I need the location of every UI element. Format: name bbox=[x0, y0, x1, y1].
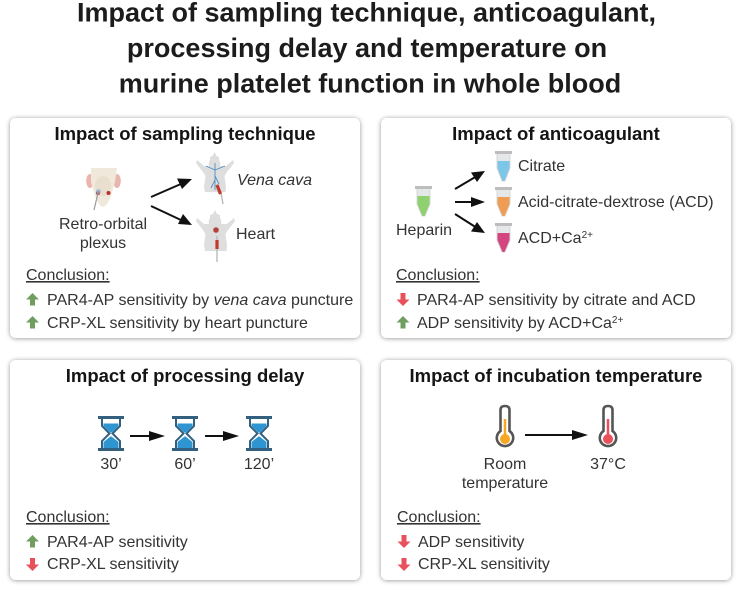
conclusion: processing delay bbox=[26, 509, 188, 573]
icon: green up arrow bbox=[26, 316, 39, 328]
icon: heparin tube bbox=[415, 186, 432, 216]
conclusion: incubation temperature bbox=[397, 509, 550, 573]
arrow: to ACD bbox=[455, 197, 485, 207]
conclusion: incubation temperature: ADP sensitivity bbox=[418, 534, 524, 551]
conclusion: processing delay: CRP-XL sensitivity bbox=[47, 556, 179, 573]
icon: mouse with vena cava puncture bbox=[196, 152, 234, 204]
icon: green up arrow bbox=[26, 535, 39, 548]
arrow: room temperature to 37 bbox=[525, 430, 588, 440]
label: 120 minutes: 120’ bbox=[244, 456, 274, 473]
panel: incubation temperature bbox=[381, 360, 731, 580]
label: 30 minutes: 30’ bbox=[100, 456, 122, 473]
conclusion: incubation temperature: CRP-XL sensitivity bbox=[418, 556, 550, 573]
label: ACD+Ca2+: ACD+Ca bbox=[518, 230, 582, 247]
icon: hourglass 30 bbox=[98, 416, 124, 451]
panel: processing delay bbox=[10, 360, 360, 580]
icon: mouse head with retro-orbital needle bbox=[86, 168, 121, 210]
title bbox=[77, 0, 656, 98]
heading: processing delay: Impact of processing delay bbox=[66, 365, 305, 386]
icon: red down arrow bbox=[26, 558, 39, 571]
arrow: to vena cava bbox=[151, 178, 192, 197]
icon: green up arrow bbox=[26, 293, 39, 306]
label: retro-orbital plexus: Retro-orbital bbox=[59, 216, 147, 233]
conclusion: anticoagulant: Conclusion: bbox=[396, 267, 480, 284]
conclusion: sampling technique: CRP-XL sensitivity by heart puncture bbox=[47, 315, 308, 332]
conclusion: anticoagulant: PAR4-AP sensitivity by citrate and ACD bbox=[417, 292, 696, 309]
label: 60 minutes: 60’ bbox=[174, 456, 196, 473]
conclusion: anticoagulant: ADP sensitivity by ACD+Ca bbox=[417, 315, 612, 332]
icon: green up arrow bbox=[396, 316, 410, 328]
arrow: 30 to 60 bbox=[130, 431, 165, 441]
label: vena cava: Vena cava bbox=[237, 172, 312, 189]
icon: red down arrow bbox=[398, 558, 410, 571]
heading: incubation temperature: Impact of incubation temperature bbox=[410, 365, 702, 386]
conclusion: sampling technique: PAR4-AP sensitivity by vena cava puncture bbox=[47, 292, 353, 309]
conclusion: processing delay: PAR4-AP sensitivity bbox=[47, 534, 188, 551]
icon: ACD+Ca tube bbox=[495, 223, 512, 252]
conclusion: sampling technique: Conclusion: bbox=[26, 267, 110, 284]
label: 37 degrees: 37°C bbox=[590, 456, 626, 473]
label: ACD: Acid-citrate-dextrose (ACD) bbox=[518, 194, 714, 211]
label: retro-orbital plexus: plexus bbox=[80, 235, 126, 252]
title: murine platelet function in whole blood bbox=[119, 68, 621, 98]
icon: citrate tube bbox=[495, 151, 512, 181]
icon: mouse with heart puncture bbox=[196, 210, 235, 262]
icon: red down arrow bbox=[396, 293, 410, 306]
icon: hourglass 120 bbox=[246, 416, 272, 451]
label: room temperature: temperature bbox=[462, 475, 548, 492]
label: retro-orbital plexus bbox=[59, 216, 147, 252]
label: citrate: Citrate bbox=[518, 158, 565, 175]
arrow: to heart bbox=[151, 206, 192, 225]
label: heart: Heart bbox=[236, 226, 276, 243]
icon: hourglass 60 bbox=[172, 416, 198, 451]
icon: red down arrow bbox=[398, 535, 410, 548]
icon: ACD tube bbox=[495, 187, 512, 216]
label: heparin: Heparin bbox=[396, 222, 452, 239]
heading: sampling technique: Impact of sampling technique bbox=[54, 123, 316, 144]
conclusion: sampling technique bbox=[26, 267, 353, 332]
label: ACD+Ca2+: 2+ bbox=[582, 230, 593, 241]
conclusion: anticoagulant: 2+ bbox=[612, 315, 623, 326]
arrow: to ACD+Ca bbox=[455, 214, 485, 233]
conclusion: incubation temperature: Conclusion: bbox=[397, 509, 481, 526]
panel: anticoagulant bbox=[381, 118, 731, 338]
label: room temperature: Room bbox=[484, 456, 526, 473]
icon: thermometer room temperature bbox=[497, 406, 513, 446]
arrow: 60 to 120 bbox=[205, 431, 239, 441]
icon: thermometer 37 bbox=[600, 406, 616, 446]
title: processing delay and temperature on bbox=[127, 33, 607, 63]
panel: sampling technique bbox=[10, 118, 360, 338]
arrow: to citrate bbox=[455, 171, 485, 189]
conclusion: processing delay: Conclusion: bbox=[26, 509, 110, 526]
conclusion: anticoagulant bbox=[396, 267, 696, 332]
label: room temperature bbox=[462, 456, 548, 492]
heading: anticoagulant: Impact of anticoagulant bbox=[452, 123, 660, 144]
